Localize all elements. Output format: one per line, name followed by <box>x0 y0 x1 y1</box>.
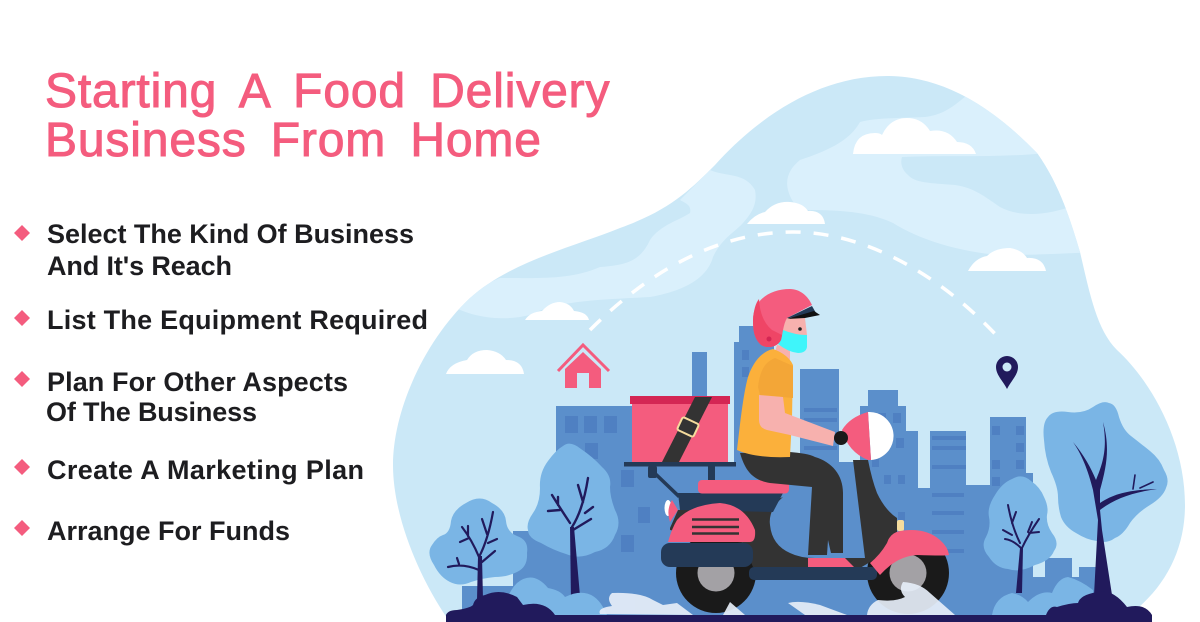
icon: home <box>558 345 609 388</box>
helmet <box>753 289 820 347</box>
shoes <box>808 558 854 567</box>
sky blob <box>393 76 1185 618</box>
tree 4 <box>1044 402 1168 595</box>
list item: other aspects <box>14 367 348 427</box>
list item: select the kind of business: And It's Reach <box>47 251 232 281</box>
front light nub <box>897 520 904 531</box>
seat base <box>678 493 783 512</box>
sleeve <box>758 358 793 398</box>
road splashes <box>600 582 955 615</box>
clouds <box>446 118 1046 374</box>
rider <box>737 289 854 567</box>
side panel <box>668 503 755 542</box>
tail light <box>664 500 678 522</box>
list item: marketing plan: Create A Marketing Plan <box>47 455 364 485</box>
mask <box>778 330 807 353</box>
rear wheel <box>676 533 756 613</box>
bushes <box>446 577 1152 615</box>
headlight <box>842 412 894 460</box>
torso <box>737 349 793 457</box>
title <box>45 65 610 167</box>
tree 2 <box>528 444 618 603</box>
rear bumper <box>661 543 753 567</box>
legs <box>740 452 843 555</box>
list item: other aspects: Of The Business <box>46 397 257 427</box>
front fender <box>870 530 949 575</box>
tree 3 <box>984 476 1057 593</box>
arm <box>759 395 835 446</box>
eye <box>798 327 802 331</box>
foot board <box>749 567 877 580</box>
title: Business From Home <box>45 114 542 167</box>
list item: equipment: List The Equipment Required <box>47 305 428 335</box>
tree 1 <box>429 498 527 600</box>
neck <box>775 345 790 360</box>
bullet list <box>14 219 428 546</box>
city buildings <box>462 326 1098 615</box>
dashed route arc <box>590 232 998 337</box>
front wheel <box>867 532 949 614</box>
handle grip <box>834 431 848 445</box>
scooter body <box>670 460 897 568</box>
list item: select the kind of business <box>14 219 414 281</box>
ground <box>446 615 1152 622</box>
seat cushion <box>698 480 789 494</box>
icon: location pin <box>996 356 1018 389</box>
delivery box <box>630 396 730 462</box>
list item: select the kind of business: Select The Kind Of Business <box>47 219 414 249</box>
list item: funds: Arrange For Funds <box>47 516 290 546</box>
list item: other aspects: Plan For Other Aspects <box>47 367 348 397</box>
scooter <box>661 412 949 614</box>
title: Starting A Food Delivery <box>45 65 610 118</box>
rack <box>624 462 736 498</box>
face <box>783 316 807 345</box>
